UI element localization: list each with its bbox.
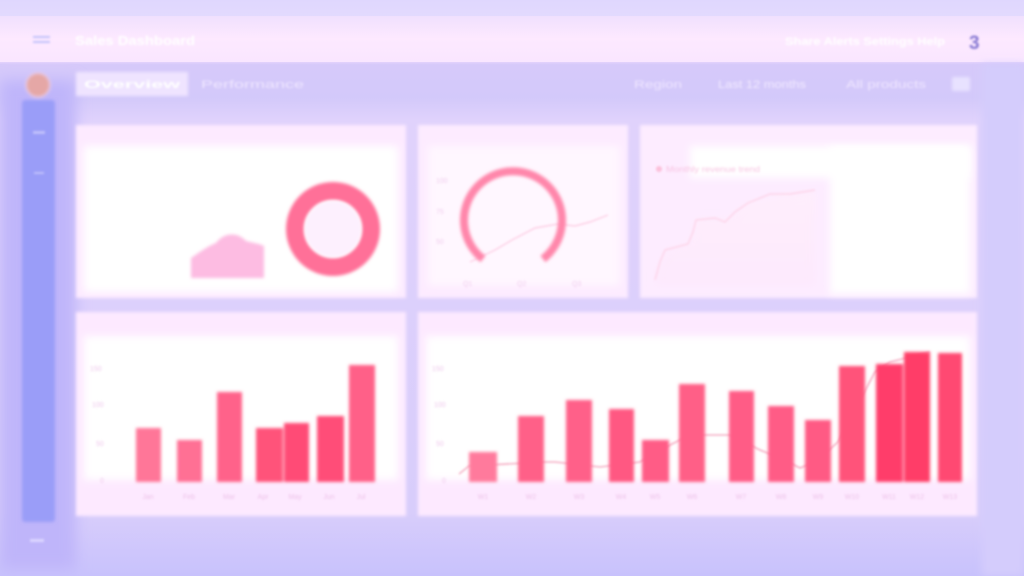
combo trend line	[459, 352, 930, 474]
gauge axis labels: 75	[436, 209, 444, 216]
panel: combo chart	[418, 312, 977, 516]
x axis labels: W11	[882, 494, 896, 501]
donut centre	[305, 201, 361, 257]
x axis labels: W8	[776, 494, 786, 501]
gauge arc	[464, 171, 562, 259]
header actions: Share Alerts Settings Help	[785, 36, 945, 48]
icon: user badge: 3	[969, 33, 980, 54]
x axis labels: May	[288, 494, 302, 501]
x axis labels: Jan	[142, 494, 154, 501]
area mini chart	[191, 234, 264, 278]
sidebar footer icon	[30, 539, 44, 542]
donut chart	[295, 191, 371, 267]
gauge axis labels: 50	[436, 239, 444, 246]
y axis labels	[90, 366, 104, 485]
x axis labels: W10	[845, 494, 859, 501]
area under trend	[655, 190, 815, 285]
panel: monthly bars	[76, 312, 406, 516]
x axis labels	[478, 494, 957, 501]
y axis labels: 50	[436, 441, 444, 448]
sidebar items	[33, 131, 45, 174]
legend: Monthly revenue trend	[666, 165, 760, 174]
y axis labels: 0	[442, 478, 446, 485]
x axis labels: W3	[574, 494, 584, 501]
y axis labels: 50	[96, 441, 104, 448]
x axis labels: W13	[943, 494, 957, 501]
x axis labels	[142, 494, 366, 501]
header title: Sales Dashboard	[75, 33, 195, 48]
panel: gauge	[418, 125, 628, 298]
avatar	[26, 73, 50, 97]
x axis labels: W7	[736, 494, 746, 501]
gauge axis labels: 100	[436, 178, 448, 185]
x axis labels: W12	[910, 494, 924, 501]
x axis labels: Feb	[183, 494, 195, 501]
y axis labels	[432, 366, 446, 485]
navigation tabs: All products	[846, 79, 927, 91]
second tab: Performance	[201, 79, 304, 91]
active tab: Overview	[84, 79, 181, 91]
panel: summary	[76, 125, 406, 298]
header bar	[0, 16, 1024, 62]
gauge axis labels: Q2	[517, 281, 526, 288]
x axis labels: Jun	[323, 494, 335, 501]
right margin	[982, 64, 1024, 576]
x axis labels: W1	[478, 494, 488, 501]
y axis labels: 150	[90, 366, 102, 373]
gauge axis labels	[436, 178, 581, 288]
x axis labels: Apr	[258, 494, 269, 501]
y axis labels: 0	[100, 478, 104, 485]
navigation tabs	[76, 72, 970, 96]
gauge trend line	[470, 215, 608, 262]
y axis labels: 100	[92, 402, 104, 409]
icon: menu	[33, 36, 50, 43]
y axis labels: 150	[432, 366, 444, 373]
y axis labels: 100	[434, 402, 446, 409]
gauge axis labels: Q1	[463, 281, 472, 288]
bar chart	[136, 365, 375, 482]
icon: export	[952, 77, 970, 91]
bar series	[469, 352, 962, 482]
x axis labels: Jul	[357, 494, 366, 501]
x axis labels: W5	[650, 494, 660, 501]
x axis labels: W4	[616, 494, 626, 501]
panel: trend	[640, 125, 977, 298]
x axis labels: W9	[813, 494, 823, 501]
x axis labels: Mar	[223, 494, 236, 501]
navigation tabs: Last 12 months	[718, 79, 807, 91]
x axis labels: W6	[687, 494, 697, 501]
active tab	[76, 72, 188, 96]
x axis labels: W2	[526, 494, 536, 501]
trend line	[655, 190, 815, 280]
sidebar	[0, 80, 76, 570]
gauge axis labels: Q3	[572, 281, 581, 288]
nav filters: Region	[634, 79, 682, 91]
